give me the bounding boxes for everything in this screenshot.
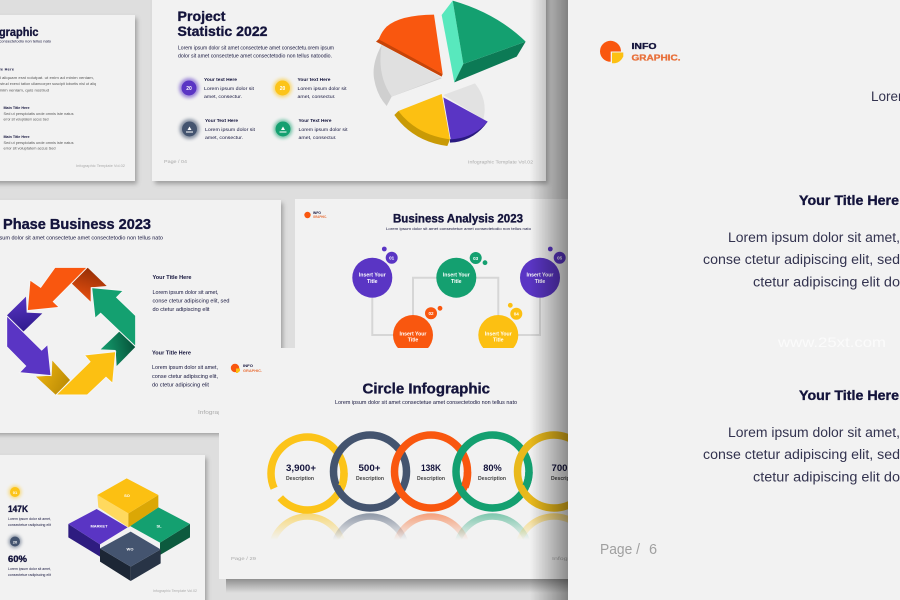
stat: 500+ xyxy=(356,464,384,481)
diagram: cycle arrows xyxy=(7,267,136,395)
logo xyxy=(231,363,262,373)
stat: 138K: Description xyxy=(417,476,445,482)
text block: intro xyxy=(0,68,96,92)
chart: interlocking rings xyxy=(267,431,568,539)
subtitle: Lorem ipsum dolor sit amet consectetue amet consectetodio non tellus nato xyxy=(386,226,532,231)
text block: first: do ctetur adipiscing elit xyxy=(152,307,210,313)
logo: INFO xyxy=(313,211,321,215)
node 04: Title xyxy=(493,338,504,344)
rings xyxy=(271,435,590,510)
panel: project statistic xyxy=(152,0,546,181)
slice: green xyxy=(442,1,526,82)
slice: orange xyxy=(376,15,443,77)
block: navy xyxy=(100,532,161,581)
logo: GRAPHIC. xyxy=(243,368,262,373)
text: navy item: Your Text Here xyxy=(205,118,238,124)
text: purple item xyxy=(204,77,255,100)
stat: 80%: Description xyxy=(478,476,506,482)
text block: main title one: error sit voluptatem accus Sed xyxy=(4,118,48,122)
slice: gray left xyxy=(374,45,442,106)
text block: first: Lorem ipsum dolor sit amet, xyxy=(152,290,219,296)
text block: main title one xyxy=(4,106,74,122)
heading: Statistic 2022 xyxy=(178,23,268,39)
node 04 xyxy=(478,303,522,355)
stat: 3,900+ xyxy=(286,464,316,481)
text block: main title two: Sed ut perspiciatis unde omnis iste natus xyxy=(4,141,74,145)
node 03 xyxy=(436,252,487,298)
panel shadows xyxy=(0,0,548,600)
stat: 500+: Description xyxy=(356,476,384,482)
stat: 147K xyxy=(8,504,51,527)
icon: navy xyxy=(8,535,22,548)
text: yellow item xyxy=(298,77,347,100)
panel: business analysis xyxy=(295,199,568,355)
stat: 138K: 138K xyxy=(421,463,441,473)
text block: second: do ctetur adipiscing elit xyxy=(152,382,210,388)
text: purple item: amet, consectur. xyxy=(204,94,242,100)
subtitle: Lorem ipsum dolor sit amet consectetue amet consectetodio non tellus nato xyxy=(335,400,517,406)
chart: isometric blocks xyxy=(68,478,190,581)
node 03: 03 xyxy=(473,256,479,261)
stat: 700: Description xyxy=(551,476,579,482)
stat: 147K: Lorem ipsum dolor sit amet, xyxy=(8,517,51,521)
node 02: 02 xyxy=(428,311,434,316)
ring reflections xyxy=(271,513,568,539)
text: purple item: Lorem ipsum dolor sit xyxy=(204,86,255,92)
arrow: orange xyxy=(27,267,107,311)
description: dolor sit amet consectetue amet consectetodio non tellus natoodio. xyxy=(178,54,332,60)
arrow: yellow xyxy=(36,352,116,395)
stat: 147K: 147K xyxy=(8,504,28,515)
logo mark xyxy=(600,41,624,64)
text: purple item: Your text Here xyxy=(204,77,237,83)
heading: Circle Infographic xyxy=(362,380,490,398)
heading xyxy=(178,8,268,39)
node 02 xyxy=(393,306,442,355)
stat: 3,900+: Description xyxy=(286,476,314,482)
slice: purple xyxy=(443,97,488,143)
stat: 700: 700 xyxy=(552,463,568,473)
block labels: MARKET xyxy=(90,524,108,528)
text block: second: Your Title Here xyxy=(799,387,899,403)
node 03: Title xyxy=(451,279,462,285)
text block: first: ctetur adipiscing elit do xyxy=(753,274,900,290)
stat: 60%: 60% xyxy=(8,554,28,565)
text: green item: Your Text Here xyxy=(298,118,332,124)
block: yellow xyxy=(97,478,158,527)
panel: bottom-left blocks xyxy=(0,455,205,600)
node 01: Title xyxy=(367,279,378,285)
text: green item: amet, consectur. xyxy=(298,135,336,141)
text block: second: conse ctetur adipiscing elit, xyxy=(152,374,218,380)
text block: second xyxy=(703,387,900,484)
text: navy item: amet, consectur. xyxy=(205,135,243,141)
description xyxy=(178,46,334,60)
text: yellow item: Lorem ipsum dolor sit xyxy=(298,86,347,92)
slice: light gray xyxy=(443,83,485,119)
panel: phase business xyxy=(0,200,281,433)
icon: purple xyxy=(179,78,199,98)
stat: 80% xyxy=(478,464,506,481)
block labels: SL xyxy=(156,524,162,528)
text: green item xyxy=(298,118,348,141)
footer: Infographic Template xyxy=(552,556,617,562)
text block: second: Lorem ipsum dolor sit amet, xyxy=(728,425,900,440)
text block: first: Your Title Here xyxy=(152,275,192,281)
heading: Phase Business 2023 xyxy=(3,216,151,233)
heading: Project xyxy=(178,8,226,24)
footer: Infographic Template xyxy=(198,410,258,416)
block labels: SO xyxy=(124,493,130,498)
panel: top-left slide xyxy=(0,15,135,181)
node 05: Insert Your xyxy=(527,272,553,278)
logo: GRAPHIC. xyxy=(313,215,327,219)
node 01: Insert Your xyxy=(359,272,386,278)
slice: yellow xyxy=(394,94,450,146)
text: yellow item: amet, consectur. xyxy=(298,94,336,100)
text block: first: conse ctetur adipiscing elit, sed xyxy=(152,298,230,304)
node 02: Title xyxy=(408,338,418,344)
text block: first xyxy=(703,192,900,290)
heading: Business Analysis 2023 xyxy=(393,212,523,226)
stat: 80%: 80% xyxy=(483,463,502,473)
stat: 60%: Lorem ipsum dolor sit amet, xyxy=(8,567,51,571)
icon: purple: 20 xyxy=(186,86,192,92)
stat: 700 xyxy=(551,464,568,481)
text block: main title two xyxy=(4,135,74,150)
node 01: 01 xyxy=(389,256,395,260)
text block: main title two: Main Title Here xyxy=(4,135,30,139)
footer: Infographic Template Vol.02 xyxy=(153,589,197,593)
block labels: WO xyxy=(127,546,133,552)
icon: yellow xyxy=(8,486,22,498)
text block: first: conse ctetur adipiscing elit, sed xyxy=(703,252,900,267)
node 03: Insert Your xyxy=(443,272,470,278)
page number: Page / xyxy=(600,542,641,558)
text: yellow item: Your text Here xyxy=(298,77,331,83)
node 05 xyxy=(520,247,566,298)
page number: Page / 04 xyxy=(164,159,187,165)
page number: 6 xyxy=(649,542,657,558)
icon: green xyxy=(274,120,292,138)
watermark: www.25xt.com xyxy=(777,334,886,350)
panel: circle infographic xyxy=(219,348,568,579)
arrow: green xyxy=(92,288,136,366)
node 01 xyxy=(352,247,398,298)
text block: second: ctetur adipiscing elit do xyxy=(753,470,900,484)
stat: 147K: consectetue radipiscing elit xyxy=(8,523,51,527)
text block: second: Your Title Here xyxy=(152,350,191,356)
icon: navy: 20 xyxy=(13,540,18,544)
logo xyxy=(600,41,680,64)
logo: GRAPHIC. xyxy=(632,52,680,62)
text: navy item: Lorem ipsum dolor sit xyxy=(205,127,256,133)
stat: 138K xyxy=(417,464,445,481)
icon: yellow: 01 xyxy=(13,490,18,495)
text block: first xyxy=(152,275,230,313)
description: Lorem ipsum dolor sit amet consectetue amet consectetu.orem ipsum xyxy=(178,46,334,52)
logo: INFO xyxy=(243,363,253,368)
stat: 3,900+: 3,900+ xyxy=(286,463,316,473)
logo: INFO xyxy=(632,41,657,51)
block: purple xyxy=(68,509,128,557)
footer: Infographic Template Vol.02 xyxy=(76,164,125,168)
node 04: 04 xyxy=(514,312,519,316)
text block: main title one: Main Title Here xyxy=(4,106,30,110)
shadow cast by right panel xyxy=(530,0,568,600)
node 04: Insert Your xyxy=(485,331,512,337)
panel shadow: circle infographic xyxy=(226,579,568,593)
stat: 60% xyxy=(8,554,51,577)
stat: 60%: consectetue radipiscing elit xyxy=(8,573,51,577)
page number: Page / 29 xyxy=(231,556,256,562)
text: navy item xyxy=(205,118,256,141)
node 02: Insert Your xyxy=(400,331,426,337)
logo xyxy=(304,211,327,219)
footer: Infographic Template Vol.02 xyxy=(468,160,534,164)
panel: right detail xyxy=(568,0,900,600)
stat: 500+: 500+ xyxy=(358,463,380,473)
flow diagram xyxy=(352,247,566,355)
heading: infographic: graphic xyxy=(0,25,39,39)
text block: first: Your Title Here xyxy=(799,192,899,208)
text block: second: conse ctetur adipiscing elit, sed xyxy=(703,447,900,462)
text block: main title one: Sed ut perspiciatis unde omnis iste natus xyxy=(4,112,74,116)
text block: main title two: error sit voluptatem accus Sed xyxy=(4,146,56,150)
connectors xyxy=(372,278,540,335)
block: green xyxy=(130,507,190,555)
node 05: Title xyxy=(535,279,545,285)
text: green item: Lorem ipsum dolor sit xyxy=(298,127,348,133)
node 05: 05 xyxy=(557,256,563,260)
text block: second: Lorem ipsum dolor sit amet, xyxy=(152,365,218,371)
icon: yellow xyxy=(273,78,292,98)
icon: navy xyxy=(180,119,200,139)
icon: yellow: 20 xyxy=(280,86,285,92)
text block: first: Lorem ipsum dolor sit amet, xyxy=(728,230,900,245)
chart: 3d pie xyxy=(374,1,526,146)
text block: second xyxy=(152,350,218,388)
block labels xyxy=(90,493,162,552)
arrow: purple xyxy=(7,297,51,376)
